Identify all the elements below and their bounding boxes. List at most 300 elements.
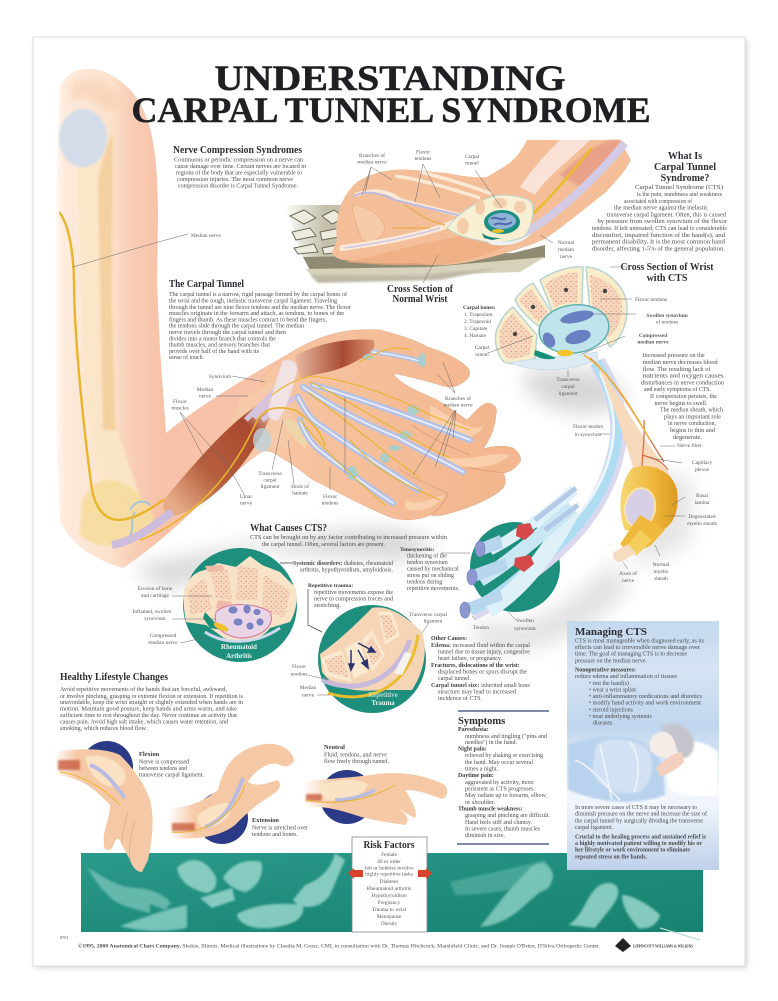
text block: healthy lifestyle changes: causes pain. Avoid high salt intake, which causes water retention, and (60, 719, 228, 725)
arm and forearm skin (56, 69, 300, 568)
text block: what is carpal tunnel syndrome: Carpal Tunnel Syndrome (CTS) (635, 184, 723, 191)
flexor tendons in hand (298, 352, 470, 503)
panel: managing CTS: Nonoperative measures: (575, 668, 636, 674)
illustration: wrist cross section with CTS: tunnel (475, 352, 489, 358)
text block: healthy lifestyle changes: Healthy Lifestyle Changes (60, 672, 168, 683)
panel: symptoms: aggravated by activity, more (465, 780, 534, 786)
text block: other causes: displaced bones or spurs disrupt the (438, 670, 527, 676)
illustration: hand labels: Branches of (445, 395, 471, 402)
text block: nerve compression syndromes: regions of the body that are especially vulnerable to (176, 170, 302, 177)
illustration: arm and hand anatomy (56, 69, 521, 568)
illustration: hand labels: hamate (292, 490, 308, 496)
hook of hamate (285, 420, 307, 448)
text block: what is carpal tunnel syndrome: Syndrome? (661, 173, 709, 184)
box: risk factors: Risk Factors (364, 840, 415, 851)
panel: managing CTS: • wear a wrist splint (589, 687, 636, 693)
text block: the carpal tunnel: thumb muscles, and sensory branches that (169, 343, 270, 349)
labels: rheumatoid arthritis: Compressed (150, 633, 177, 639)
illustration: wrist cross section with CTS: of tendons (656, 318, 678, 326)
median and ulnar nerves (60, 213, 470, 540)
illustration: hand labels: tendons (322, 500, 338, 506)
soft cast shadows (130, 368, 695, 652)
forearm flexor muscle (163, 402, 270, 516)
text block: healthy lifestyle changes (60, 672, 244, 732)
label: extension: Nerve is stretched over (252, 826, 308, 832)
illustration: repetitive trauma circle: Trauma (371, 700, 395, 707)
labels: nerve and tendon: nerve (622, 578, 635, 584)
text block: the carpal tunnel: muscles originate in the forearm and attach, as tendons, to bones of the (169, 310, 344, 317)
panel: symptoms: Hand feels stiff and clumsy. (465, 819, 533, 826)
text block: the carpal tunnel (169, 279, 351, 361)
illustration: repetitive trauma circle: Repetitive (368, 692, 398, 699)
text block: the carpal tunnel: divides into a motor branch that controls the (169, 336, 276, 342)
publisher logo: LIPPINCOTT WILLIAMS & WILKINS (633, 944, 693, 948)
text block: what causes CTS (250, 523, 447, 548)
box: risk factors: Female (381, 852, 398, 858)
panel: managing CTS (567, 621, 719, 870)
labels: nerve and tendon: Tendon (473, 625, 489, 631)
text block: the carpal tunnel: the wrist and the tough, inelastic transverse carpal ligament. Traveling (169, 298, 337, 304)
elbow joint (80, 480, 154, 546)
labels: nerve and tendon (409, 442, 717, 648)
text block: compressed median nerve effects: begins to thin and (670, 428, 715, 434)
text block: the carpal tunnel: fingers and thumb. As these muscles contract to bend the fingers, (169, 316, 328, 323)
illustration: hand labels: nerve (240, 500, 253, 506)
carpal tunnel contents (484, 210, 520, 234)
panel: managing CTS: diseases (593, 721, 613, 727)
text block: other causes: heart failure, or pregnancy. (438, 655, 503, 662)
illustration: sleeping person (568, 724, 718, 806)
illustration: hand labels: median nerve (443, 402, 473, 408)
text block: other causes (431, 636, 530, 702)
text block: the carpal tunnel: nerve travels through the carpal tunnel and then (169, 330, 286, 336)
text block: tenosynovitis: stress put on sliding (407, 573, 454, 579)
labels: nerve and tendon: Basal (696, 493, 708, 499)
label: extension: Extension (252, 817, 279, 824)
illustration: wrist cross section with CTS: ligament (559, 391, 578, 397)
labels: nerve and tendon: Normal (653, 562, 670, 568)
illustration: neutral hand (303, 770, 447, 825)
text block: compressed median nerve effects: and early symptoms of CTS. (644, 386, 712, 393)
text block: compressed median nerve effects: flow. The resulting lack of (643, 366, 711, 373)
labels: normal wrist: Carpal (465, 154, 480, 160)
text block: what causes CTS: CTS can be brought on by any factor contributing to increased pressure within (250, 534, 447, 541)
panel: managing CTS: the carpal tunnel by surgically dividing the transverse (575, 818, 703, 824)
inflamed synovium (514, 523, 534, 572)
labels: rheumatoid arthritis: synovium (144, 616, 166, 622)
illustration: wrist cross section with CTS: median nerve (637, 340, 669, 346)
illustration: hand labels: Median (197, 387, 214, 393)
footer credit (60, 935, 600, 950)
text block: what is carpal tunnel syndrome: disorder, affecting 1-5% of the general population. (592, 245, 726, 252)
illustration: hand labels: Ulnar (240, 494, 252, 500)
text block: systemic disorders and repetitive trauma: arthritis, hypothyroidism, amyloidosis. (300, 568, 394, 574)
panel: managing CTS: In more severe cases of CTS it may be necessary to (575, 804, 697, 811)
shoulder joint (59, 109, 107, 167)
illustration: rheumatoid arthritis circle: Rheumatoid (221, 644, 257, 651)
text block: what is carpal tunnel syndrome: tendons. If left untreated, CTS can lead to considerable (592, 225, 727, 232)
text block: nerve compression syndromes: Nerve Compression Syndromes (173, 145, 302, 156)
labels: repetitive trauma: tendons (291, 672, 307, 678)
labels: nerve and tendon: Nerve fiber (677, 442, 702, 449)
labels: nerve and tendon: sheath (654, 576, 668, 582)
text block: nerve compression syndromes: cause damage over time. Certain nerves are located in (175, 164, 306, 170)
panel: symptoms: Daytime pain: (458, 773, 494, 779)
text block: healthy lifestyle changes: sufficient time to rest throughout the day. Never continue an activity that (60, 712, 237, 719)
panel: symptoms: relieved by shaking or exercising (465, 753, 543, 759)
heading: cross section of wrist with CTS: with CTS (647, 273, 688, 284)
labels: normal wrist: Normal (558, 240, 575, 246)
tendon sheath pulleys (347, 353, 426, 480)
panel: symptoms: Symptoms (458, 716, 505, 727)
labels: rheumatoid arthritis: and cartilage (141, 593, 169, 599)
text block: what is carpal tunnel syndrome (592, 151, 727, 252)
panel: symptoms: Thumb muscle weakness: (458, 806, 523, 812)
flexor tendon synovium ribbon (472, 362, 619, 612)
text block: what is carpal tunnel syndrome: discomfort, impaired function of the hand(s), and (592, 232, 725, 239)
title (132, 58, 650, 130)
text block: other causes: structure may lead to increased (438, 690, 516, 696)
panel: symptoms: Night pain: (458, 746, 487, 752)
labels: repetitive trauma: Flexor (292, 664, 306, 670)
publisher logo (615, 938, 693, 952)
illustration: wrist cross section with CTS: Transverse (556, 377, 580, 383)
labels: rheumatoid arthritis: Inflamed, swollen (133, 608, 172, 615)
panel: managing CTS: • rest the hand(s) (589, 680, 629, 687)
illustration: hand labels: carpal (263, 478, 277, 484)
text block: what is carpal tunnel syndrome: is the pain, numbness and weakness (637, 192, 723, 198)
labels: rheumatoid arthritis: Erosion of bone (138, 585, 173, 592)
labels: nerve and tendon: Degenerated (688, 514, 716, 520)
text block: compressed median nerve effects: degenerate. (673, 435, 703, 441)
labels: nerve and tendon: myelin (654, 569, 669, 575)
text block: compressed median nerve effects: median nerve decreases blood (643, 360, 718, 366)
clasped hands and brace (177, 860, 262, 908)
illustration: wrist cross section with CTS: Carpal (475, 345, 490, 351)
tendons (540, 308, 595, 350)
hand skin (262, 330, 521, 520)
labels: nerve and tendon: Axon of (619, 570, 637, 577)
labels: repetitive trauma (291, 664, 330, 698)
panel: managing CTS: • treat underlying systemic (589, 714, 652, 720)
illustration: hand labels (171, 362, 473, 506)
panel: symptoms: persistent as CTS progresses. (465, 786, 536, 792)
thumb and knuckle shading (345, 235, 520, 265)
panel: symptoms: Paresthesia: (458, 727, 489, 733)
illustration: wrist cross section with CTS: Swollen synovium (646, 313, 688, 319)
labels: nerve and tendon: Capillary (692, 460, 712, 466)
panel: managing CTS: effects can lead to irreversible nerve damage over (575, 644, 700, 651)
illustration: rheumatoid arthritis circle: Arthritis (226, 653, 252, 660)
panel: symptoms: May radiate up to forearm, elbow, (465, 792, 548, 799)
label: flexion: Nerve is compressed (139, 760, 189, 766)
forearm lower skin (195, 372, 290, 505)
text block: the carpal tunnel: provide over half of the hand with its (169, 348, 260, 355)
label: cross section of normal wrist: Normal Wrist (392, 294, 448, 305)
illustration: hand labels: muscles (171, 406, 189, 412)
text block: healthy lifestyle changes: unavoidable, keep the wrist straight or slightly extended when hands are in (60, 700, 243, 706)
box: risk factors: Hypothyroidism (371, 893, 407, 899)
text block: compressed median nerve effects: If compression persists, the (650, 393, 717, 400)
labels: rheumatoid arthritis (133, 585, 215, 646)
text block: compressed median nerve effects: The median sheath, which (660, 408, 723, 414)
text block: what causes CTS: What Causes CTS? (250, 523, 327, 534)
text block: healthy lifestyle changes: motion. Maintain good posture, keep hands and arms warm, and take (60, 707, 237, 713)
label: flexion (139, 751, 205, 779)
panel: managing CTS: Managing CTS (575, 626, 647, 638)
text block: the carpal tunnel: through the tunnel are nine flexor tendons and the median nerve. The flexor (169, 304, 351, 311)
teal backing circle (470, 522, 560, 612)
text block: the carpal tunnel: the tendons slide through the carpal tunnel. The median (169, 324, 304, 330)
text block: compressed median nerve effects (641, 353, 724, 441)
illustration: rheumatoid arthritis circle (183, 548, 297, 662)
wrist cross section bones (447, 195, 533, 242)
panel: managing CTS: time. The goal of managing CTS is to decrease (575, 651, 687, 658)
typing hand (88, 868, 187, 931)
labels: normal wrist: tendons (415, 156, 431, 162)
panel: symptoms: or shoulder. (465, 800, 496, 806)
panel: symptoms: In severe cases, thumb muscles (465, 826, 541, 832)
panel: managing CTS: carpal ligament. (575, 825, 614, 831)
text block: healthy lifestyle changes: or involve pinching, grasping or extreme flexion or extension. If repetition is (60, 693, 244, 700)
illustration: wrist cross section with CTS: 2. Trapezoid (464, 319, 491, 325)
text block: nerve compression syndromes (173, 145, 306, 190)
tendon ends (460, 535, 508, 618)
heading: cross section of wrist with CTS: Cross Section of Wrist (620, 262, 714, 273)
label: median nerve (73, 233, 221, 267)
carpal bones (495, 267, 627, 364)
forearm tendons (112, 512, 172, 545)
text block: tenosynovitis: repetitive movements. (407, 586, 460, 592)
text block: what is carpal tunnel syndrome: Carpal Tunnel (654, 162, 716, 173)
panel: managing CTS: • modify hand activity and work environment (589, 700, 701, 707)
labels: nerve and tendon: myelin sheath (687, 521, 717, 527)
curled finger (352, 205, 385, 242)
box: risk factors: Obesity (381, 921, 398, 927)
pale carpal bursa (253, 428, 271, 452)
labels: normal wrist (357, 150, 575, 260)
label: cross section of normal wrist (387, 255, 454, 305)
labels: nerve and tendon: lamina (695, 500, 710, 506)
myelin sheath (620, 466, 678, 535)
text block: compressed median nerve effects: in nerve conduction, (668, 421, 717, 427)
label: extension (252, 817, 308, 838)
illustration: wrist cross section with CTS: 1. Trapezium (464, 312, 493, 318)
box: risk factors (352, 837, 427, 932)
leaders and labels (488, 267, 636, 377)
nerve fibers (596, 360, 672, 478)
text block: what is carpal tunnel syndrome: What Is (668, 151, 702, 162)
panel: managing CTS: reduce edema and inflammation of tissues (575, 673, 678, 680)
labels: nerve and tendon: Swollen (516, 618, 534, 624)
labels: nerve and tendon: ligament (424, 618, 443, 624)
illustration: hand labels: nerve (199, 394, 212, 400)
illustration: wrist cross section with CTS (463, 267, 688, 438)
panel: symptoms: the hand. May occur several (465, 760, 533, 766)
label: neutral: Neutral (324, 744, 345, 751)
panel: managing CTS: repeated stress on the hands. (575, 855, 648, 861)
box: risk factors: Menopause (377, 914, 402, 920)
footer credit: 8701 (60, 935, 68, 940)
text block: compressed median nerve effects: disturbances in nerve conduction (641, 380, 724, 386)
text block: systemic disorders and repetitive trauma: nerve to compression forces and (314, 595, 393, 602)
illustration: hand labels: Flexor (173, 399, 187, 405)
illustration: hand labels: Synovium (209, 374, 232, 380)
text block: other causes: Edema: increased fluid within the carpal (431, 642, 530, 649)
label: extension: tendons and bones. (252, 832, 299, 838)
illustration: flexion hand (55, 741, 153, 872)
panel: managing CTS: pressure on the median nerve. (575, 659, 648, 665)
illustration: hand labels: Transverse (258, 471, 282, 477)
panel: symptoms: diminish in size. (465, 833, 506, 839)
label: flexion: transverse carpal ligament. (139, 773, 205, 779)
label: flexion: Flexion (139, 751, 160, 758)
labels: repetitive trauma: Median (300, 685, 317, 691)
box: risk factors: 40 or older (377, 859, 401, 865)
text block: other causes: tunnel due to tissue injury, congestive (438, 650, 530, 656)
text block: compressed median nerve effects: Increased pressure on the (643, 353, 705, 359)
text block: other causes: carpal tunnel. (438, 676, 472, 682)
text block: tenosynovitis: Tenosynovitis: (400, 547, 434, 553)
title: UNDERSTANDING (214, 58, 566, 98)
text block: other causes: incidence of CTS. (438, 695, 483, 702)
panel: symptoms (457, 711, 551, 844)
axon of nerve (613, 544, 636, 562)
illustration: hand labels: Hook of (291, 483, 309, 490)
illustration: wrist cross section with CTS: Flexor tendon (573, 424, 603, 430)
illustration: hand labels: ligament (261, 484, 280, 490)
text block: tenosynovitis: caused by mechanical (407, 567, 459, 573)
labels: repetitive trauma: nerve (302, 692, 315, 698)
panel: symptoms: needles") in the hand. (465, 739, 518, 746)
label: flexion: between tendons and (139, 766, 187, 772)
panel: managing CTS: • steroid injections (589, 707, 634, 713)
text block: systemic disorders and repetitive trauma: Systemic disorders: diabetes, rheumatoid (293, 561, 393, 567)
text block: what causes CTS: the carpal tunnel. Often, several factors are present. (262, 541, 386, 548)
label: neutral: Fluid, tendons, and nerve (324, 753, 387, 759)
box: risk factors: Pregnancy (378, 900, 401, 906)
text block: healthy lifestyle changes: smoking, which reduces blood flow. (60, 725, 148, 732)
illustration: wrist cross section with CTS: Flexor tendons (635, 297, 667, 303)
text block: nerve compression syndromes: compression injuries. The most common nerve (177, 177, 293, 183)
panel: managing CTS: • anti-inflammatory medications and diuretics (589, 693, 703, 700)
text block: systemic disorders and repetitive trauma: Repetitive trauma: (308, 583, 353, 589)
text block: tenosynovitis (400, 547, 460, 592)
box: risk factors: Diabetes (380, 879, 398, 885)
knitting hands (568, 883, 660, 928)
bone numbers (513, 288, 607, 336)
humerus (77, 130, 138, 500)
swollen synovium (536, 300, 612, 358)
heading: cross section of wrist with CTS (620, 262, 714, 284)
footer credit: ©1995, 2000 Anatomical Chart Company, Skokie, Illinois. Medical illustrations by Claudia M. Grosz, CMI, in consultation with Dr. Thomas Hitchcock, Marshfield Clinic, and Dr. Joseph O'Brien, D'Silva Orthopedic Center. (78, 942, 600, 950)
icon: red arrow right (418, 868, 432, 879)
panel: symptoms: grasping and pinching are difficult. (465, 812, 551, 819)
box: risk factors: highly repetitive tasks (365, 872, 413, 878)
hand and forearm (332, 140, 631, 265)
keyboard tray (285, 205, 345, 258)
transverse carpal ligament (511, 352, 598, 370)
finger separations (400, 425, 505, 515)
labels: normal wrist: nerve (560, 254, 573, 260)
panel: managing CTS: her lifestyle or work environment to eliminate (575, 848, 690, 854)
transverse carpal ligament (268, 360, 297, 421)
label: cross section of normal wrist: Cross Section of (387, 284, 454, 295)
text block: other causes: Carpal tunnel size: inherited small bone (431, 683, 530, 689)
illustration: wrist cross section with CTS: 3. Capitate (464, 326, 488, 332)
labels: rheumatoid arthritis: median nerve (148, 640, 178, 646)
illustration: wrist cross section with CTS: Carpal bones: (463, 305, 496, 311)
finger tendons (342, 222, 455, 248)
text block: other causes: Other Causes: (431, 636, 467, 642)
illustration: tendon in synovium and nerve (460, 355, 678, 618)
panel: managing CTS: a highly motivated patient willing to modify his or (575, 841, 702, 847)
text block: nerve compression syndromes: Continuous or periodic compression on a nerve can (174, 158, 303, 164)
text block: compressed median nerve effects: nutrients and oxygen causes (643, 374, 724, 380)
guitar and hand (450, 860, 553, 927)
box: risk factors: Trauma to wrist (372, 907, 407, 913)
tendon bundle (480, 488, 578, 610)
illustration: extension hand (168, 744, 294, 844)
label: median nerve: Median nerve (191, 233, 221, 239)
panel: managing CTS: CTS is most manageable when diagnosed early, as its (575, 639, 705, 645)
banner: hands at repetitive tasks (81, 853, 703, 940)
text block: what is carpal tunnel syndrome: permanent disability. It is the most common hand (592, 240, 725, 246)
labels: nerve and tendon: plexus (695, 467, 709, 473)
labels: normal wrist: median nerve (357, 160, 387, 166)
text block: other causes: Fractures, dislocations of the wrist: (431, 663, 520, 669)
text block: systemic disorders and repetitive trauma: repetitive movements expose the (314, 590, 393, 596)
box: risk factors: Job or hobbies involve (365, 866, 414, 872)
icon: red arrow left (348, 868, 363, 879)
bone stipple (499, 272, 622, 359)
text block: tenosynovitis: tendons during (407, 580, 442, 586)
labels: nerve and tendon: Transverse carpal (409, 612, 447, 618)
labels: nerve and tendon: synovium (514, 626, 536, 632)
illustration: wrist cross section with CTS: in synovium (575, 432, 602, 438)
text block: systemic disorders and repetitive trauma (280, 561, 394, 632)
text block: what is carpal tunnel syndrome: associated with compression of (624, 198, 692, 205)
forearm muscle and nerve (520, 140, 590, 195)
text block: systemic disorders and repetitive trauma: stretching. (314, 603, 342, 609)
panel: managing CTS: Crucial to the healing process and sustained relief is (575, 835, 707, 841)
panel: symptoms: times a night. (465, 766, 499, 772)
illustration: wrist cross section with CTS: carpal (561, 384, 575, 390)
ulnar artery and median nerve (534, 350, 556, 359)
panel: symptoms: numbness and tingling ("pins and (465, 733, 547, 740)
text block: the carpal tunnel: The Carpal Tunnel (169, 279, 244, 290)
labels: normal wrist: tunnel (465, 160, 479, 166)
text block: tenosynovitis: tendon synovium (407, 560, 448, 566)
title: CARPAL TUNNEL SYNDROME (132, 90, 650, 130)
illustration: hand labels: Flexor (323, 494, 337, 500)
text block: what is carpal tunnel syndrome: the median nerve against the inelastic (614, 206, 708, 212)
illustration: wrist cross section with CTS: 4. Hamate (464, 333, 487, 339)
pale finger highlights (405, 405, 510, 511)
label: neutral: flow freely through tunnel. (324, 758, 390, 765)
labels: normal wrist: Branches of (359, 152, 385, 159)
text block: what is carpal tunnel syndrome: transverse carpal ligament. Often, this is caused (607, 211, 726, 218)
labels: normal wrist: median (558, 247, 574, 253)
text block: nerve compression syndromes: compression disorder is Carpal Tunnel Syndrome. (178, 184, 299, 190)
panel: managing CTS: diminish pressure on the nerve and increase the size of (575, 811, 707, 818)
scrubbing hand and cloth (237, 853, 345, 928)
text block: tenosynovitis: thickening of the (407, 553, 447, 560)
text block: healthy lifestyle changes: Avoid repetitive movements of the hands that are forceful, awkward, (60, 686, 228, 693)
text block: compressed median nerve effects: nerve begins to swell. (654, 401, 708, 407)
text block: what is carpal tunnel syndrome: by pressure from swollen synovium of the flexor (598, 218, 727, 225)
labels: normal wrist: Flexor (416, 150, 430, 156)
